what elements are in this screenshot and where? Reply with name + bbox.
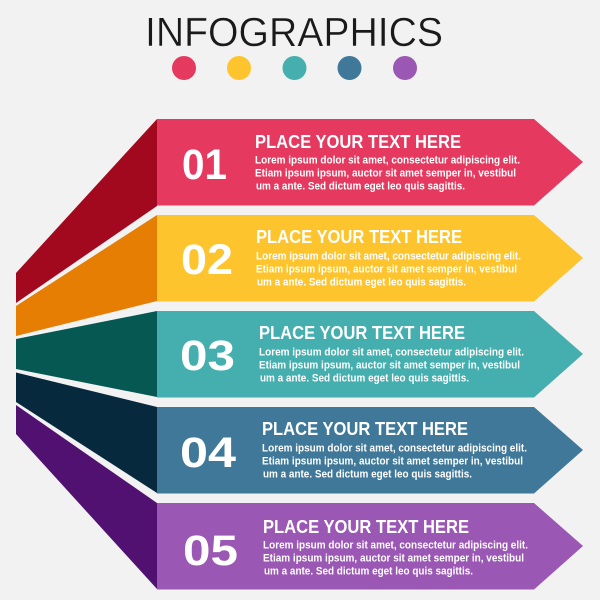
side face 04 — [16, 372, 157, 493]
body text 01 — [255, 154, 520, 192]
heading 05: PLACE YOUR TEXT HERE — [263, 517, 469, 537]
body text 03: Etiam ipsum ipsum, auctor sit amet semper in, vestibul — [259, 360, 520, 372]
number 04: 04 — [180, 429, 236, 477]
body text 05: um a ante. Sed dictum eget leo quis sagittis. — [264, 566, 473, 578]
number 03: 03 — [180, 332, 235, 380]
panel: step 05 — [16, 405, 583, 590]
body text 02: um a ante. Sed dictum eget leo quis sagittis. — [257, 276, 466, 288]
body text 05: Lorem ipsum dolor sit amet, consectetur adipiscing elit. — [263, 540, 528, 552]
heading 01: PLACE YOUR TEXT HERE — [255, 132, 461, 152]
arrow 04 — [157, 407, 583, 494]
heading 02: PLACE YOUR TEXT HERE — [256, 227, 462, 247]
body text 05 — [263, 540, 528, 578]
body text 02 — [256, 250, 521, 288]
body text 03: um a ante. Sed dictum eget leo quis sagittis. — [260, 372, 469, 384]
body text 02: Lorem ipsum dolor sit amet, consectetur adipiscing elit. — [256, 250, 521, 262]
panel: step 01 — [16, 119, 583, 303]
number 02: 02 — [181, 236, 233, 284]
body text 01: Lorem ipsum dolor sit amet, consectetur adipiscing elit. — [255, 154, 520, 166]
arrow 05 — [157, 503, 583, 590]
body text 04: um a ante. Sed dictum eget leo quis sagittis. — [263, 468, 472, 480]
body text 03: Lorem ipsum dolor sit amet, consectetur adipiscing elit. — [259, 346, 524, 358]
side face 05 — [16, 405, 157, 589]
body text 04: Lorem ipsum dolor sit amet, consectetur adipiscing elit. — [262, 442, 527, 454]
body text 04 — [262, 442, 527, 480]
arrow 01 — [157, 119, 583, 206]
body text 03 — [259, 346, 524, 384]
number 01: 01 — [182, 141, 227, 189]
body text 01: um a ante. Sed dictum eget leo quis sagittis. — [256, 180, 465, 192]
panel: step 04 — [16, 372, 583, 494]
body text 04: Etiam ipsum ipsum, auctor sit amet semper in, vestibul — [262, 456, 523, 468]
body text 05: Etiam ipsum ipsum, auctor sit amet semper in, vestibul — [263, 552, 524, 564]
side face 01 — [16, 119, 157, 303]
arrow 02 — [157, 215, 583, 302]
heading 03: PLACE YOUR TEXT HERE — [259, 323, 465, 343]
body text 02: Etiam ipsum ipsum, auctor sit amet semper in, vestibul — [256, 264, 517, 276]
panel: step 02 — [16, 215, 583, 336]
heading 04: PLACE YOUR TEXT HERE — [262, 419, 468, 439]
arrow 03 — [157, 311, 583, 398]
colour dots — [172, 56, 417, 80]
title: INFOGRAPHICS — [145, 9, 443, 55]
panel: step 03 — [16, 311, 583, 398]
side face 03 — [16, 311, 157, 397]
number 05: 05 — [183, 527, 238, 575]
body text 01: Etiam ipsum ipsum, auctor sit amet semper in, vestibul — [255, 168, 516, 180]
side face 02 — [16, 215, 157, 336]
